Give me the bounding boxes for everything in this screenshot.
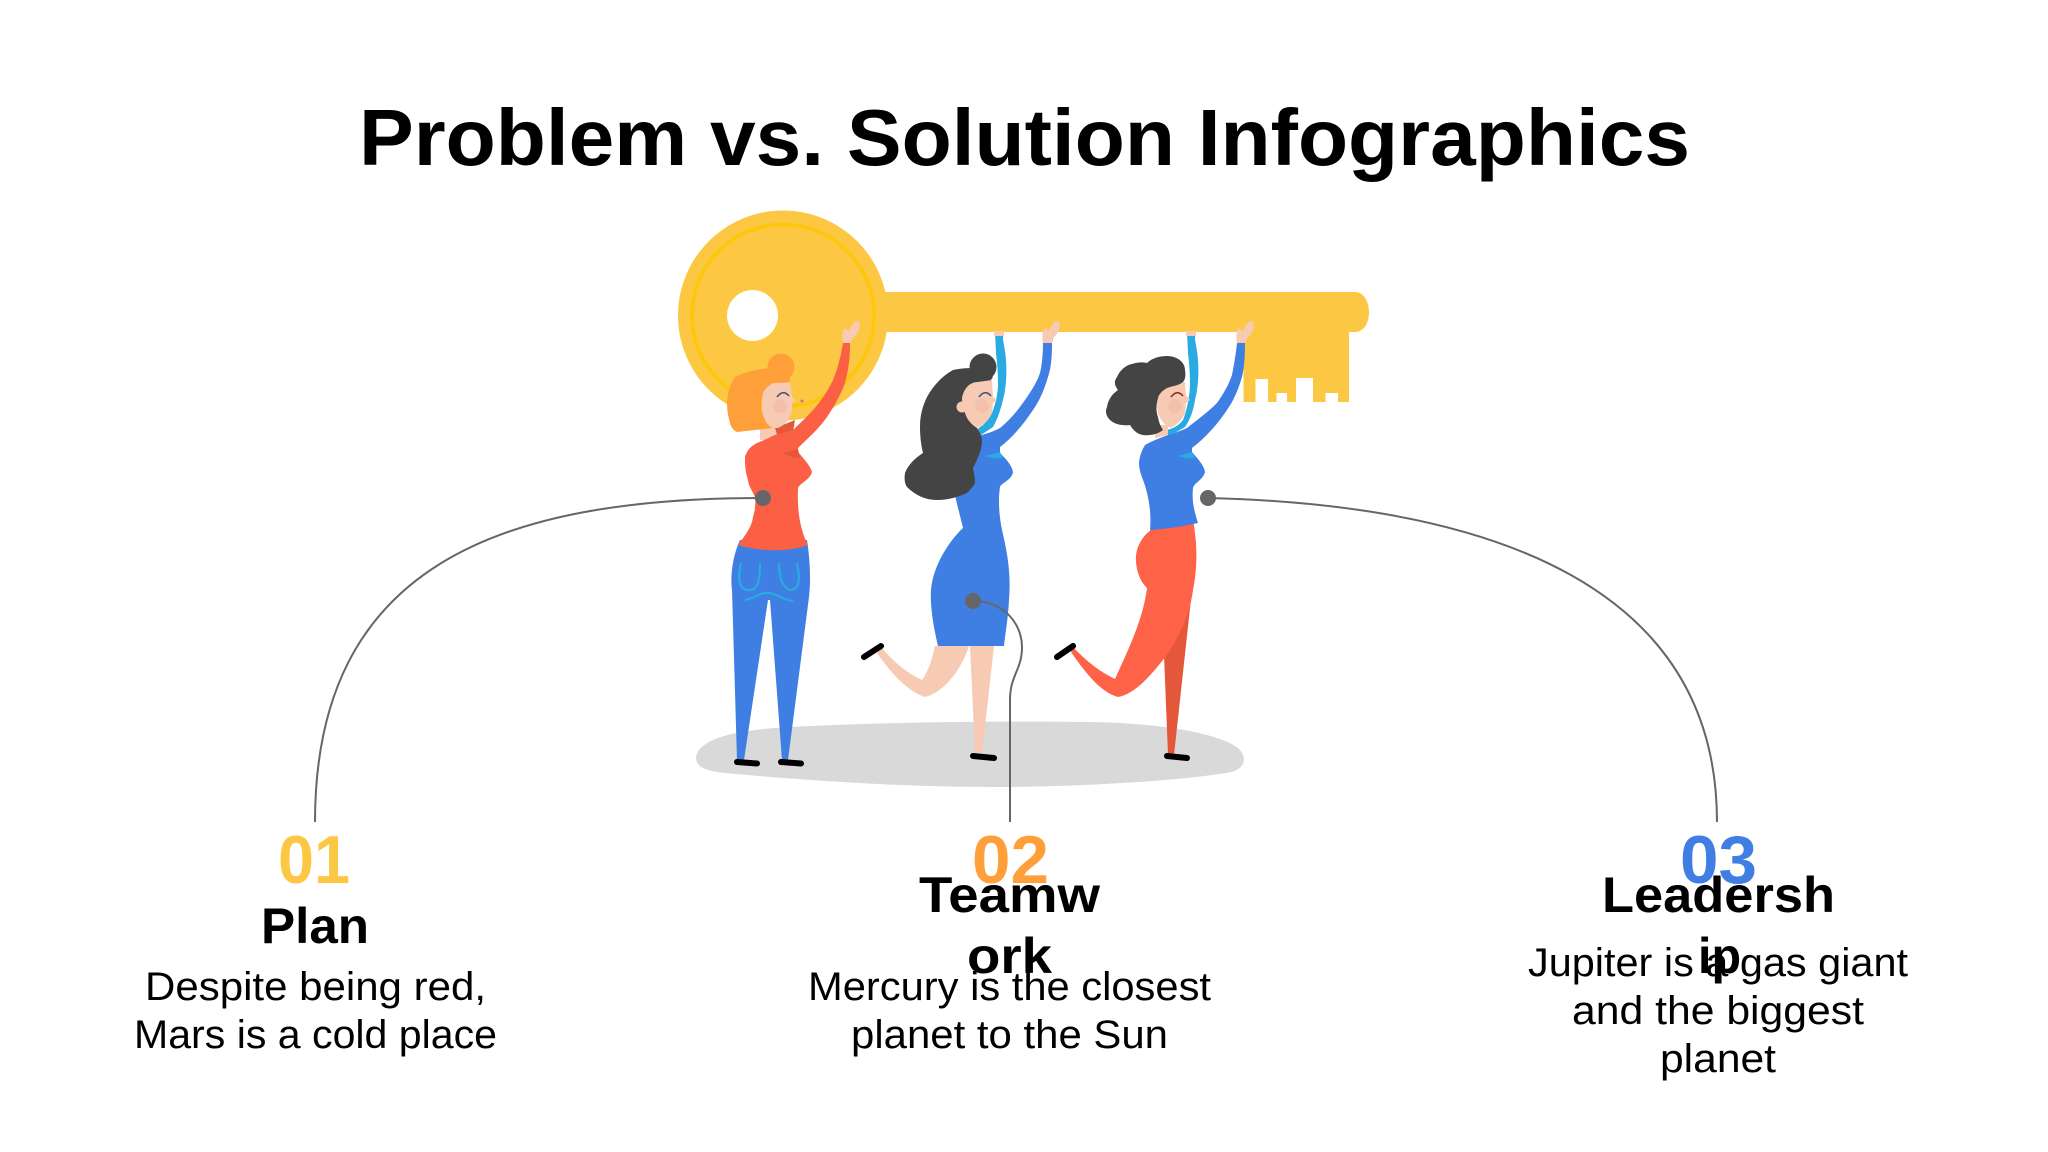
shoes (864, 646, 994, 758)
person 3: curly hair, blue top, red trousers (1057, 321, 1254, 758)
description: Despite being red, (145, 965, 486, 1009)
connector: step 03 (1200, 490, 1717, 822)
step 01: plan (134, 822, 497, 1057)
raised arm (780, 343, 850, 448)
connector: step 02 (965, 593, 1022, 822)
heading: Teamw (919, 867, 1100, 923)
shoes (737, 762, 801, 764)
red trousers (1071, 520, 1196, 697)
number: 03 (1680, 822, 1757, 898)
curly hair (1106, 356, 1185, 435)
number: 01 (278, 822, 350, 898)
blue top (1139, 435, 1205, 530)
number: 02 (972, 822, 1049, 898)
person 2: long dark hair, blue dress (864, 321, 1060, 758)
collar (775, 420, 795, 438)
face (762, 382, 796, 428)
ground shadow (696, 722, 1244, 787)
heading: ip (1698, 928, 1741, 984)
step 02: teamwork (808, 822, 1211, 1057)
blue dress (931, 437, 1013, 646)
connector: step 01 (315, 490, 771, 822)
hand back (994, 331, 1004, 336)
face (1157, 382, 1190, 428)
hand (1042, 321, 1060, 343)
description: and the biggest (1572, 989, 1864, 1033)
face (962, 380, 997, 428)
description: planet (1660, 1037, 1776, 1081)
description: Jupiter is a gas giant (1528, 941, 1908, 985)
back arm (976, 332, 1006, 437)
person 1: orange hair, red top, blue jeans (727, 321, 860, 764)
back arm (1167, 332, 1198, 437)
chest patch (1178, 452, 1195, 458)
title: Problem vs. Solution Infographics (359, 93, 1690, 182)
raised arm (975, 343, 1052, 450)
neck (760, 424, 780, 440)
description: Mercury is the closest (808, 965, 1211, 1009)
bent leg (877, 646, 969, 697)
neck (1155, 425, 1168, 438)
hair (905, 368, 993, 500)
jeans pockets (739, 563, 799, 601)
red top (738, 430, 812, 550)
standing leg (1164, 590, 1192, 755)
heading: Plan (261, 898, 369, 954)
hand (1236, 321, 1254, 343)
raised arm (1168, 343, 1245, 448)
step 03: leadership (1528, 822, 1908, 1081)
jeans (731, 540, 810, 760)
hand (842, 321, 860, 343)
chest patch (985, 452, 1003, 458)
hand back (1186, 331, 1196, 336)
hair (727, 368, 790, 432)
shoes (1057, 646, 1187, 758)
heading: ork (967, 928, 1052, 984)
chest crease (783, 449, 800, 458)
icon: key (678, 210, 1369, 420)
description: Mars is a cold place (134, 1013, 497, 1057)
description: planet to the Sun (851, 1013, 1168, 1057)
standing leg (970, 646, 994, 753)
heading: Leadersh (1602, 867, 1835, 923)
